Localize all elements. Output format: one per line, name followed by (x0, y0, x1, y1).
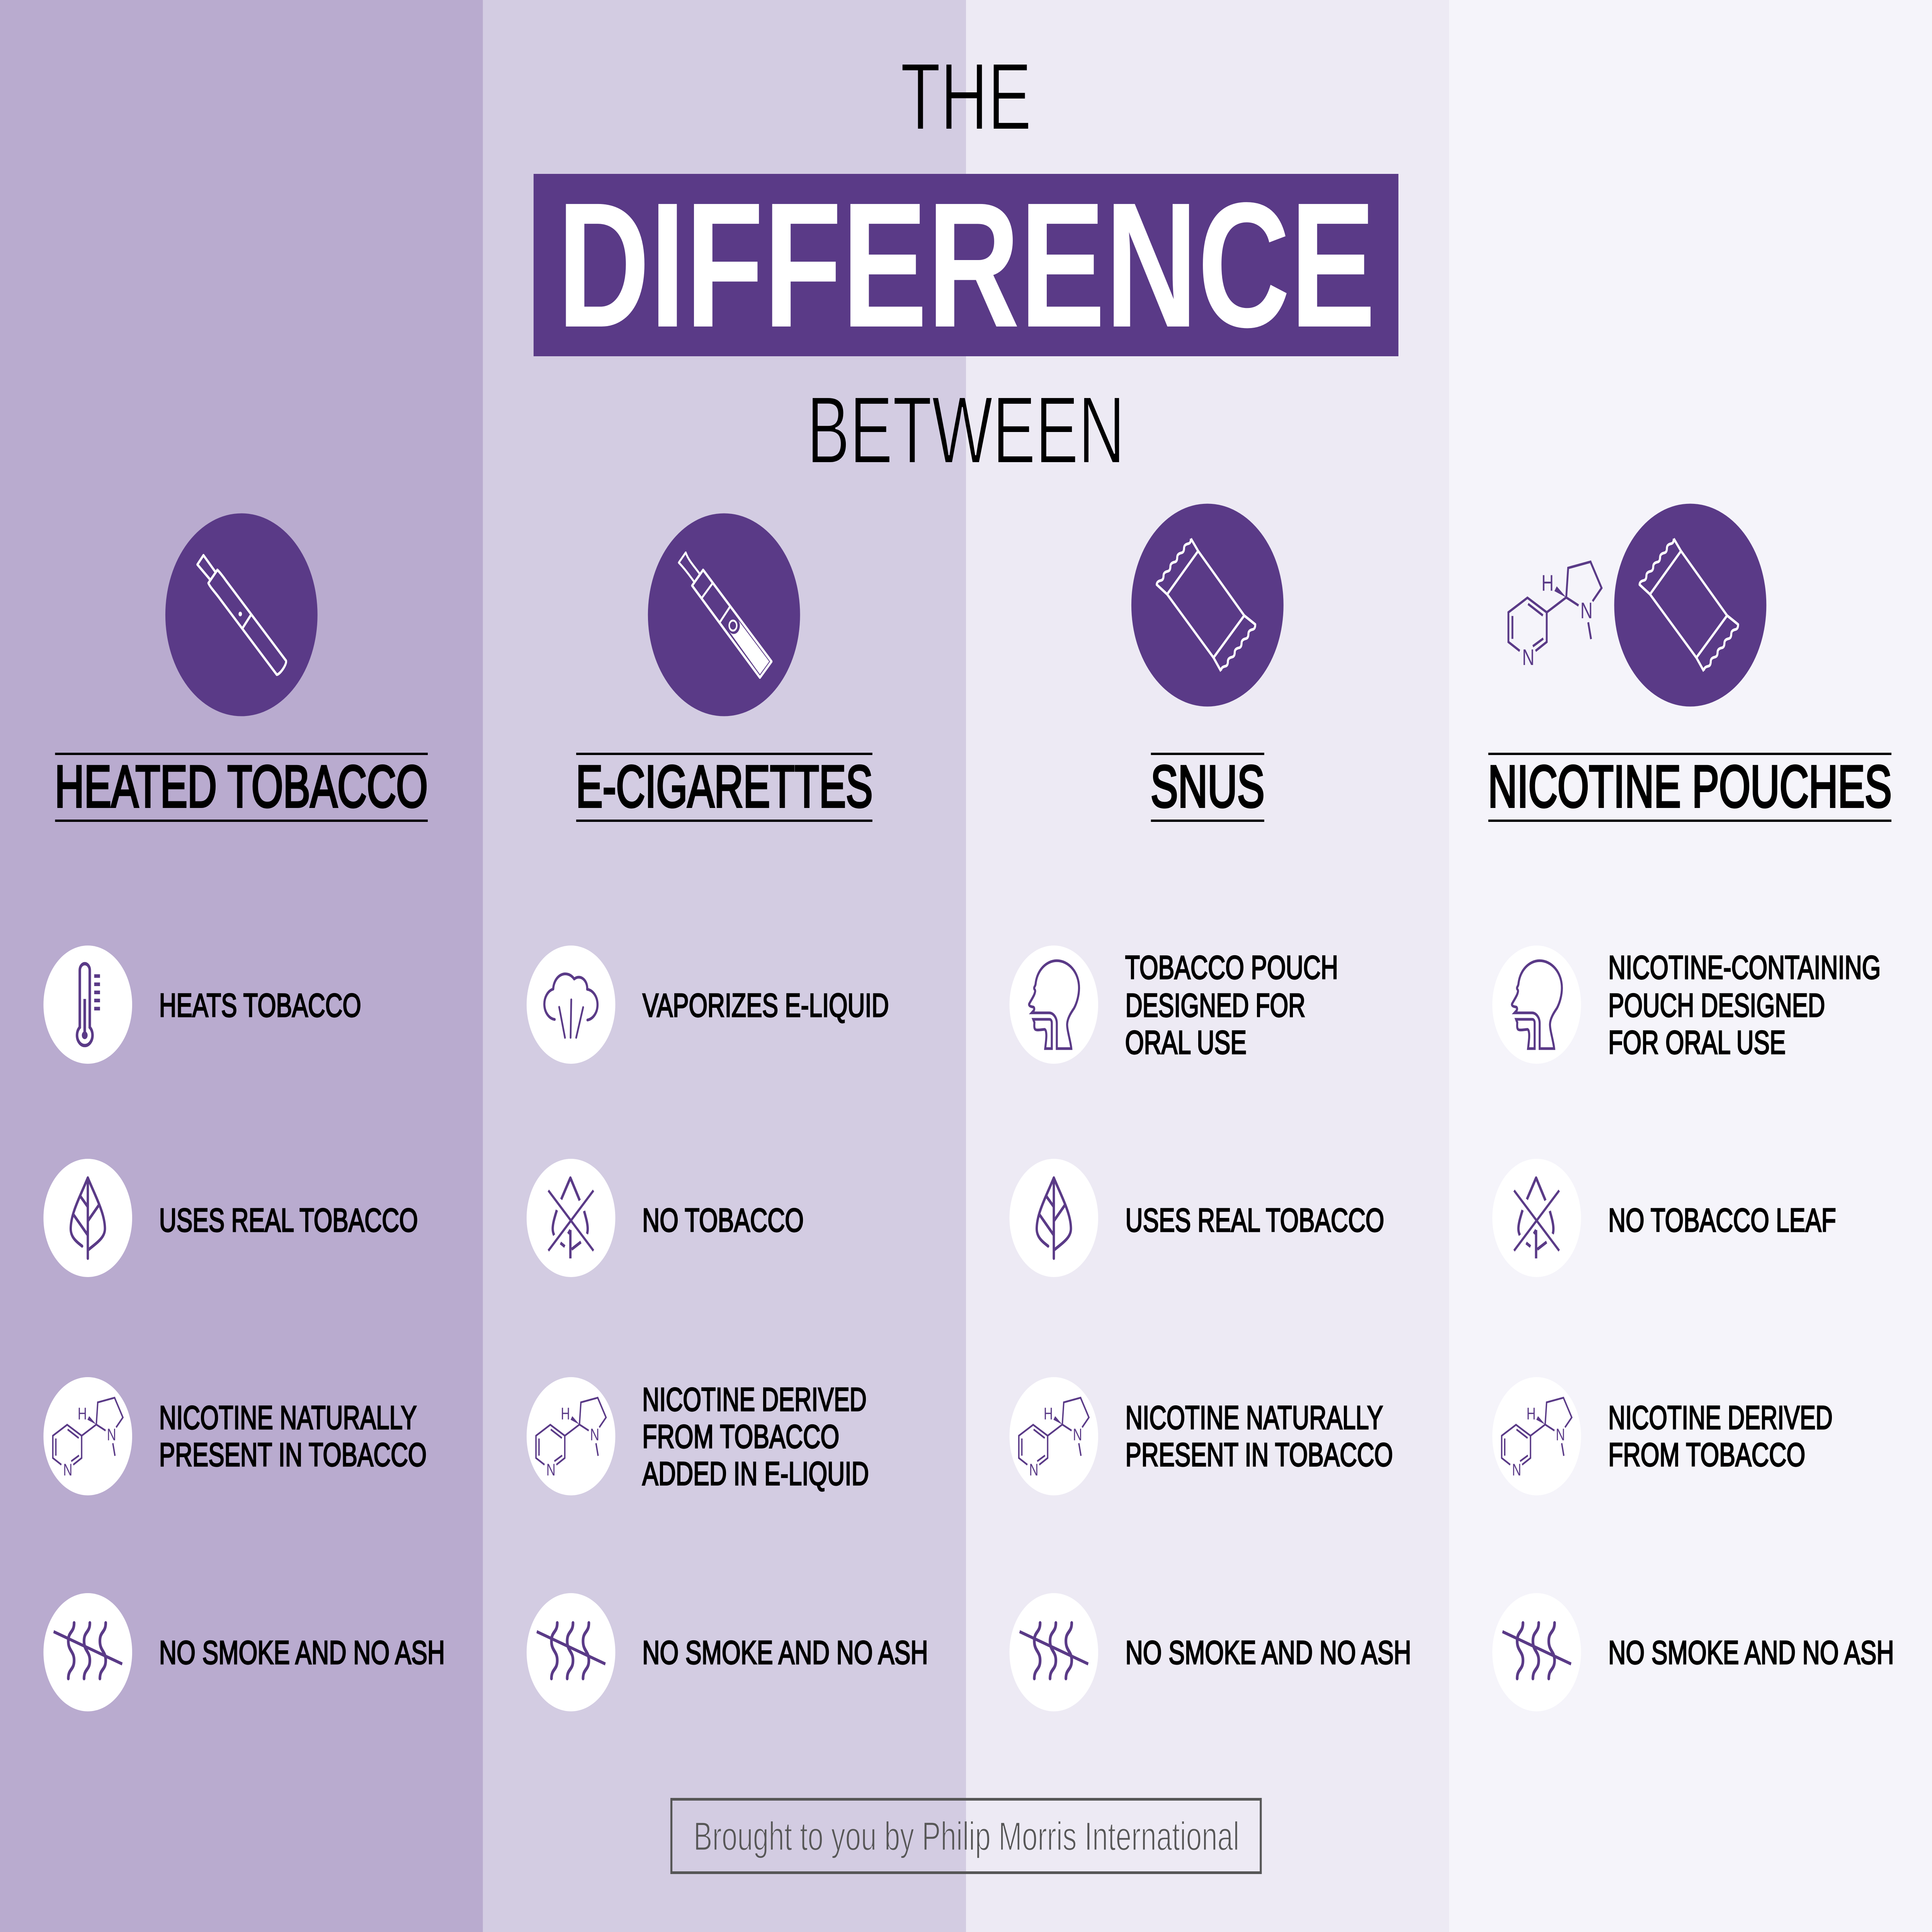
icon: leaf (44, 1159, 132, 1277)
title banner: difference: DIFFERENCE (557, 166, 1376, 364)
icon: nicotine molecule hero: N (1580, 598, 1593, 623)
row: nicotine derived (527, 1377, 869, 1495)
icon: nicotine molecule: H (561, 1405, 570, 1423)
icon: leaf (1010, 1159, 1098, 1277)
title line: between: BETWEEN (807, 377, 1125, 483)
text: tobacco pouch designed for oral use: ORAL USE (1125, 1024, 1247, 1061)
row: no smoke and no ash (527, 1593, 928, 1711)
icon: vapor cloud (527, 946, 615, 1064)
icon: leaf crossed out (1492, 1159, 1581, 1277)
row: no smoke and no ash (1010, 1593, 1411, 1711)
row: nicotine derived (1492, 1377, 1833, 1495)
icon: nicotine molecule: N (1073, 1425, 1082, 1444)
row: no smoke and no ash (44, 1593, 445, 1711)
row: uses real tobacco (44, 1159, 418, 1277)
footer credit box: Brought to you by Philip Morris International (694, 1814, 1239, 1859)
text: no smoke and no ash: NO SMOKE AND NO ASH (1126, 1634, 1411, 1671)
text: nicotine naturally present in tobacco: PRESENT IN TOBACCO (1126, 1436, 1393, 1473)
text: no tobacco leaf: NO TOBACCO LEAF (1608, 1202, 1836, 1238)
row: no tobacco (527, 1159, 804, 1277)
icon: nicotine molecule (44, 1377, 132, 1495)
icon: leaf crossed out (527, 1159, 615, 1277)
text: nicotine derived from tobacco added in e-liquid: NICOTINE DERIVED (642, 1381, 867, 1418)
heading: nicotine pouches: NICOTINE POUCHES (1488, 753, 1892, 820)
icon: nicotine molecule: N (63, 1461, 72, 1479)
text: no smoke and no ash: NO SMOKE AND NO ASH (1608, 1634, 1894, 1671)
row: nicotine naturally present (1010, 1377, 1393, 1495)
icon: nicotine molecule hero: N (1522, 645, 1534, 670)
icon: nicotine molecule (527, 1377, 615, 1495)
title line: the: THE (900, 43, 1032, 150)
text: nicotine derived from tobacco added in e-liquid: FROM TOBACCO (642, 1418, 839, 1455)
text: tobacco pouch designed for oral use: TOBACCO POUCH (1125, 949, 1338, 986)
text: vaporizes e-liquid: VAPORIZES E-LIQUID (643, 987, 889, 1024)
icon: snus pouch (1131, 504, 1284, 706)
text: uses real tobacco: USES REAL TOBACCO (159, 1202, 418, 1238)
text: nicotine-containing pouch designed for oral use: NICOTINE-CONTAINING (1608, 949, 1881, 986)
heading: heated tobacco: HEATED TOBACCO (55, 753, 428, 820)
panel: heated tobacco (0, 0, 483, 1932)
text: nicotine derived from tobacco: FROM TOBACCO (1608, 1436, 1805, 1473)
text: nicotine derived from tobacco: NICOTINE DERIVED (1608, 1399, 1833, 1436)
icon: head profile (1010, 946, 1098, 1064)
text: heats tobacco: HEATS TOBACCO (159, 987, 361, 1024)
text: nicotine-containing pouch designed for oral use: POUCH DESIGNED (1608, 987, 1825, 1024)
icon: nicotine molecule: H (1527, 1405, 1536, 1423)
icon: nicotine molecule: N (546, 1461, 556, 1479)
row: tobacco pouch (1010, 946, 1338, 1064)
icon: e-cigarette device (648, 513, 800, 716)
icon: smoke crossed out (527, 1593, 615, 1711)
row: no smoke and no ash (1492, 1593, 1894, 1711)
row: nicotine-containing pouch (1492, 946, 1881, 1064)
icon: nicotine molecule: H (78, 1405, 87, 1423)
icon: nicotine molecule: N (1556, 1425, 1565, 1444)
icon: nicotine molecule (1010, 1377, 1098, 1495)
icon: nicotine molecule: N (107, 1425, 116, 1444)
panel: nicotine pouches (1449, 0, 1932, 1932)
footer credit box (672, 1799, 1261, 1872)
icon: nicotine molecule: N (590, 1425, 599, 1444)
heading: snus: SNUS (1151, 753, 1265, 820)
icon: heated tobacco device (165, 513, 318, 716)
icon: smoke crossed out (44, 1593, 132, 1711)
text: nicotine-containing pouch designed for oral use: FOR ORAL USE (1608, 1024, 1786, 1061)
text: nicotine naturally present in tobacco: NICOTINE NATURALLY (159, 1399, 417, 1436)
text: tobacco pouch designed for oral use: DESIGNED FOR (1126, 987, 1305, 1024)
text: no smoke and no ash: NO SMOKE AND NO ASH (159, 1634, 445, 1671)
icon: nicotine molecule: N (1029, 1461, 1038, 1479)
icon: nicotine molecule: N (1512, 1461, 1521, 1479)
icon: thermometer (44, 946, 132, 1064)
panel: e-cigarettes (483, 0, 966, 1932)
icon: smoke crossed out (1010, 1593, 1098, 1711)
icon: nicotine molecule: H (1044, 1405, 1053, 1423)
text: nicotine naturally present in tobacco: NICOTINE NATURALLY (1126, 1399, 1383, 1436)
text: uses real tobacco: USES REAL TOBACCO (1126, 1202, 1384, 1238)
text: no tobacco: NO TOBACCO (642, 1202, 804, 1238)
row: vaporizes e-liquid (527, 946, 889, 1064)
row: uses real tobacco (1010, 1159, 1384, 1277)
icon: nicotine molecule (1492, 1377, 1581, 1495)
icon: head profile (1492, 946, 1581, 1064)
heading: e-cigarettes: E-CIGARETTES (576, 753, 872, 820)
row: no tobacco leaf (1492, 1159, 1836, 1277)
text: no smoke and no ash: NO SMOKE AND NO ASH (642, 1634, 928, 1671)
title (534, 43, 1398, 483)
row: heats tobacco (44, 946, 361, 1064)
text: nicotine derived from tobacco added in e-liquid: ADDED IN E-LIQUID (642, 1455, 869, 1492)
row: nicotine naturally present (44, 1377, 427, 1495)
icon: smoke crossed out (1492, 1593, 1581, 1711)
panel: snus (966, 0, 1449, 1932)
icon: nicotine pouch (1614, 504, 1766, 706)
icon: nicotine molecule hero: H (1541, 570, 1554, 595)
icon: nicotine molecule hero (1509, 562, 1602, 670)
text: nicotine naturally present in tobacco: PRESENT IN TOBACCO (159, 1436, 427, 1473)
